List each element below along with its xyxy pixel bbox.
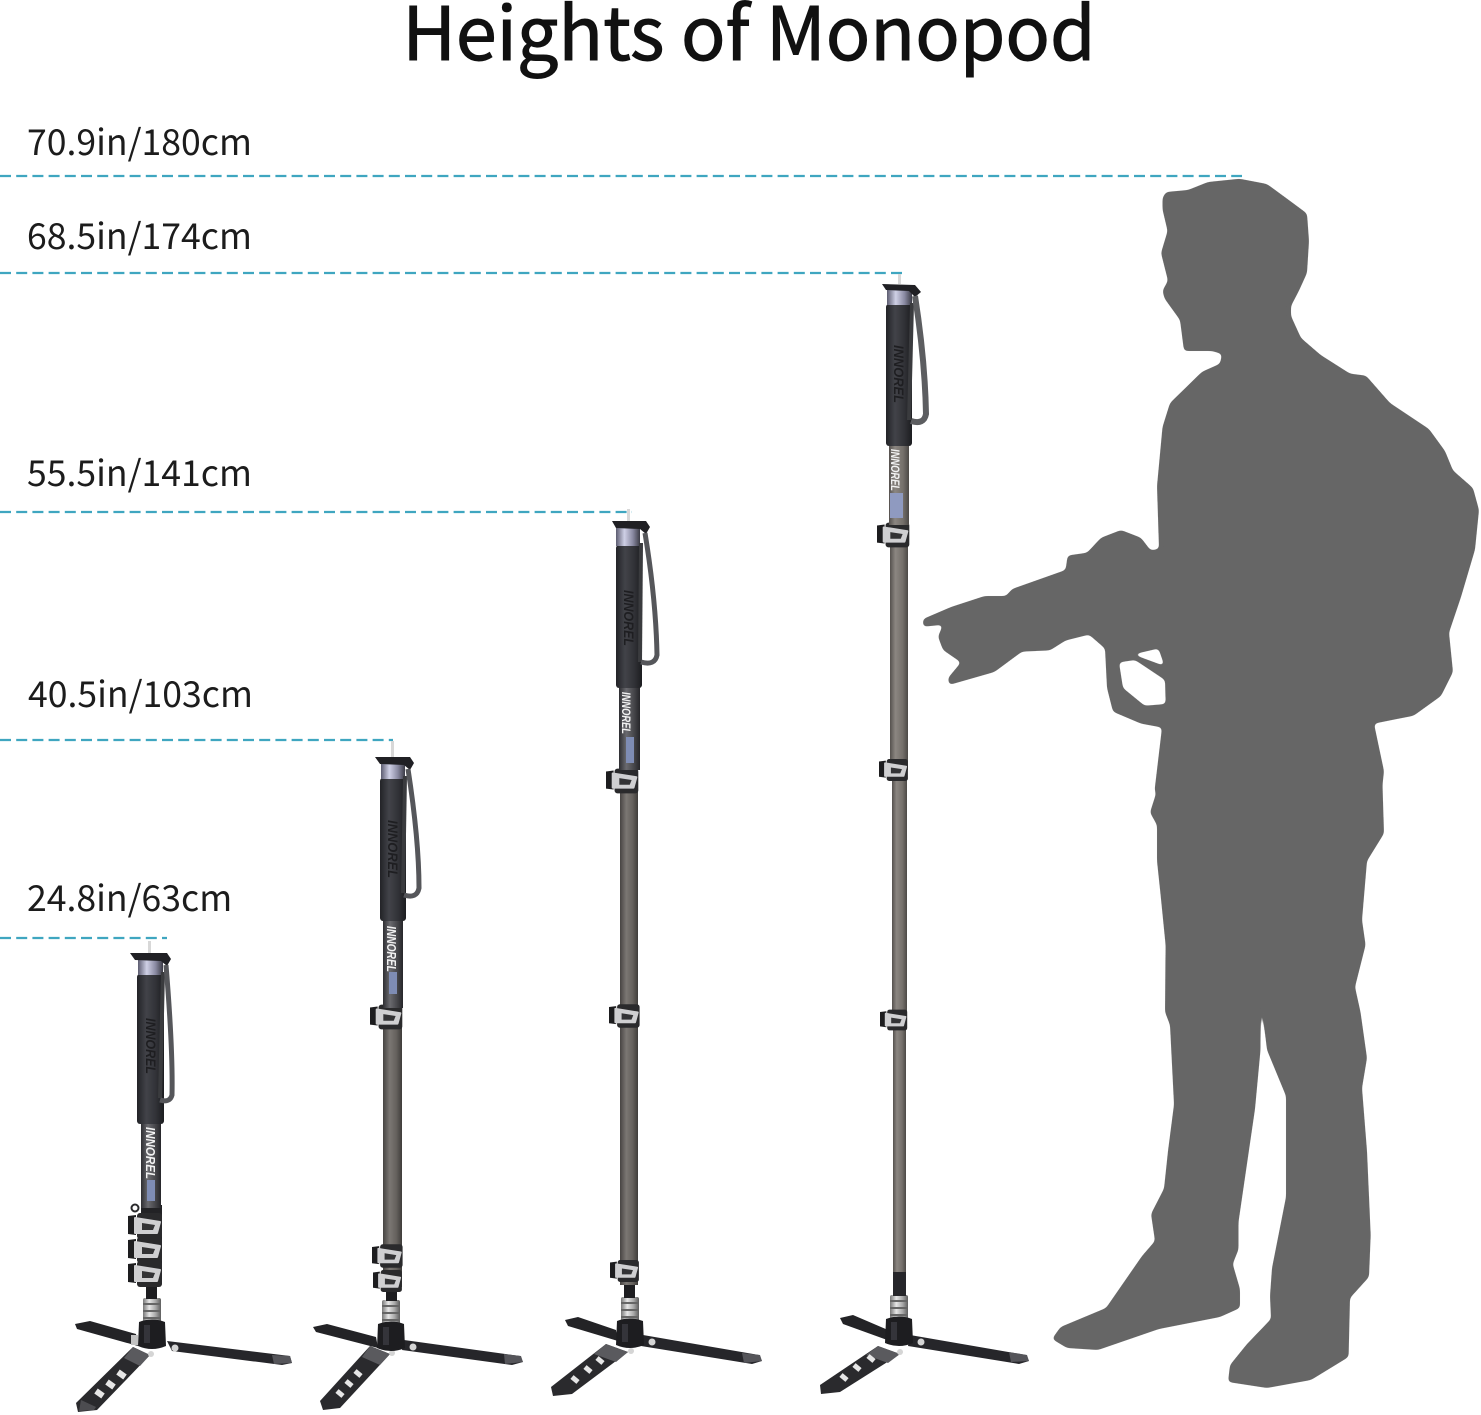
monopod 2	[313, 741, 523, 1410]
foam grip	[137, 974, 164, 1124]
clamps	[128, 1204, 162, 1287]
clamps	[877, 523, 909, 1030]
carbon tube	[383, 1025, 402, 1287]
foam grip	[380, 778, 406, 921]
foam grip	[616, 545, 642, 688]
monopod 1: fully collapsed	[75, 941, 292, 1412]
upper tube with logo: INNOREL	[619, 692, 633, 734]
wrist strap	[909, 296, 926, 422]
foam grip: INNOREL	[143, 1018, 159, 1074]
label: 55.5in/141cm	[27, 446, 252, 497]
legs	[75, 1321, 292, 1412]
lower tube with logo	[141, 1120, 161, 1208]
carbon tube	[620, 785, 638, 1285]
clamps	[370, 1005, 403, 1292]
carbon tube	[893, 1020, 906, 1272]
lower tube with logo: INNOREL	[143, 1127, 158, 1179]
upper tube with logo: INNOREL	[384, 926, 399, 972]
wrist strap	[403, 769, 419, 896]
wrist strap	[640, 533, 657, 663]
label: 40.5in/103cm	[28, 667, 253, 718]
person silhouette with backpack and camera	[923, 179, 1479, 1388]
wrist strap	[160, 965, 172, 1101]
legs	[313, 1324, 523, 1410]
foam grip: INNOREL	[891, 345, 907, 403]
monopod 3	[551, 509, 762, 1396]
foam grip: INNOREL	[385, 820, 401, 878]
monopod 4: fully extended	[820, 274, 1029, 1394]
label: 70.9in/180cm	[27, 115, 252, 166]
clamps	[606, 769, 640, 1282]
upper tube with logo	[888, 443, 909, 525]
upper tube with logo	[383, 918, 403, 1008]
foam grip	[886, 304, 912, 446]
label: 68.5in/174cm	[27, 209, 252, 260]
legs	[820, 1315, 1029, 1394]
foam grip: INNOREL	[621, 590, 637, 646]
legs	[551, 1317, 762, 1396]
upper tube with logo: INNOREL	[888, 449, 902, 491]
upper tube with logo	[619, 685, 640, 770]
label: 24.8in/63cm	[27, 871, 232, 922]
